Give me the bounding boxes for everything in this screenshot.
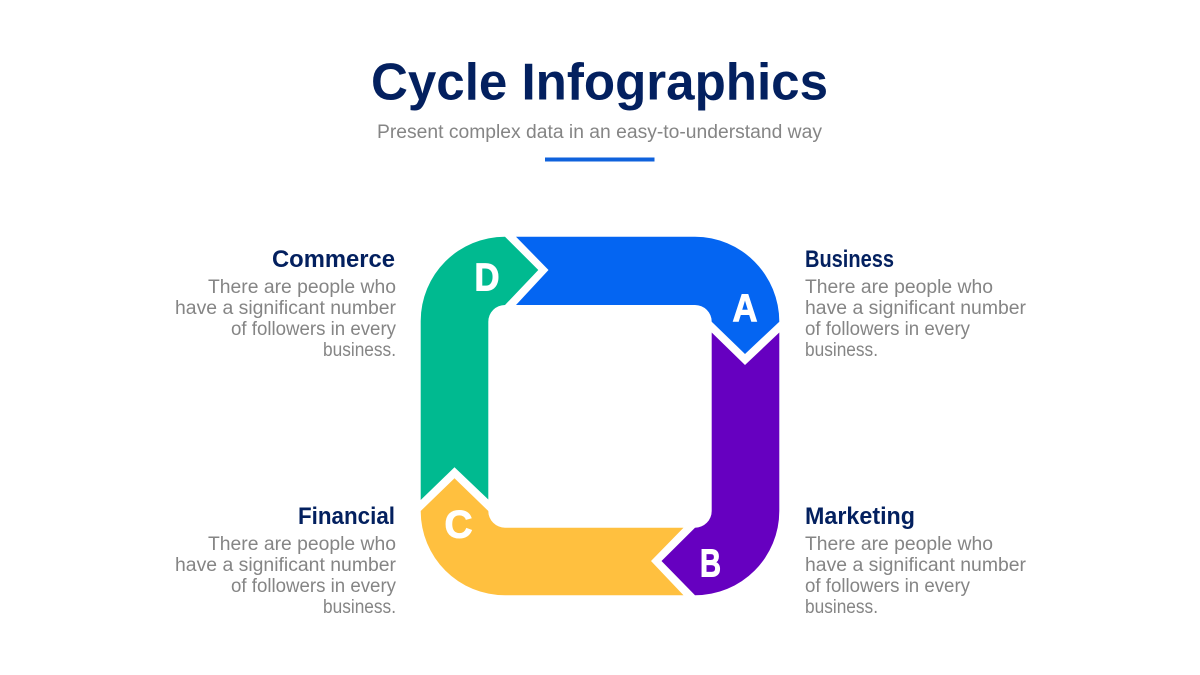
subtitle: Present complex data in an easy-to-understand way: [377, 122, 822, 143]
segment C: yellow arrow: [421, 478, 684, 595]
body text: Business: have a significant number: [805, 298, 1027, 319]
header: [371, 54, 828, 162]
panel: Marketing: [805, 503, 1027, 618]
body text: Marketing: business.: [805, 597, 878, 618]
segment B: purple arrow: [662, 332, 779, 595]
body text: Business: business.: [805, 340, 878, 361]
body text: Business: There are people who: [805, 277, 993, 298]
body text: Commerce: business.: [323, 340, 396, 361]
body text: Financial: have a significant number: [175, 555, 397, 576]
title underline: [545, 158, 654, 162]
body text: Commerce: of followers in every: [231, 319, 396, 340]
heading: Financial: Financial: [298, 503, 395, 530]
body text: Financial: of followers in every: [231, 576, 396, 597]
letter C: C: [444, 504, 472, 546]
body text: Marketing: There are people who: [805, 534, 993, 555]
body text: Marketing: have a significant number: [805, 555, 1027, 576]
panel: Commerce: [175, 246, 397, 361]
body text: Financial: There are people who: [208, 534, 396, 555]
letter B: B: [700, 543, 721, 586]
letter A: A: [732, 288, 758, 331]
body text: Marketing: [805, 534, 1027, 618]
body text: Marketing: of followers in every: [805, 576, 970, 597]
body text: Commerce: [175, 277, 397, 361]
panel: Business: [805, 246, 1027, 361]
body text: Commerce: have a significant number: [175, 298, 397, 319]
cycle diagram: [421, 237, 779, 595]
body text: Business: [805, 277, 1027, 361]
segment A: blue arrow: [516, 237, 779, 354]
heading: Business: Business: [805, 246, 894, 273]
heading: Marketing: Marketing: [805, 503, 915, 530]
body text: Financial: [175, 534, 397, 618]
body text: Business: of followers in every: [805, 319, 970, 340]
body text: Commerce: There are people who: [208, 277, 396, 298]
panel: Financial: [175, 503, 397, 618]
segment D: green arrow: [421, 237, 538, 500]
heading: Commerce: Commerce: [272, 246, 395, 273]
letter D: D: [474, 257, 500, 300]
body text: Financial: business.: [323, 597, 396, 618]
title: Cycle Infographics: [371, 54, 828, 112]
